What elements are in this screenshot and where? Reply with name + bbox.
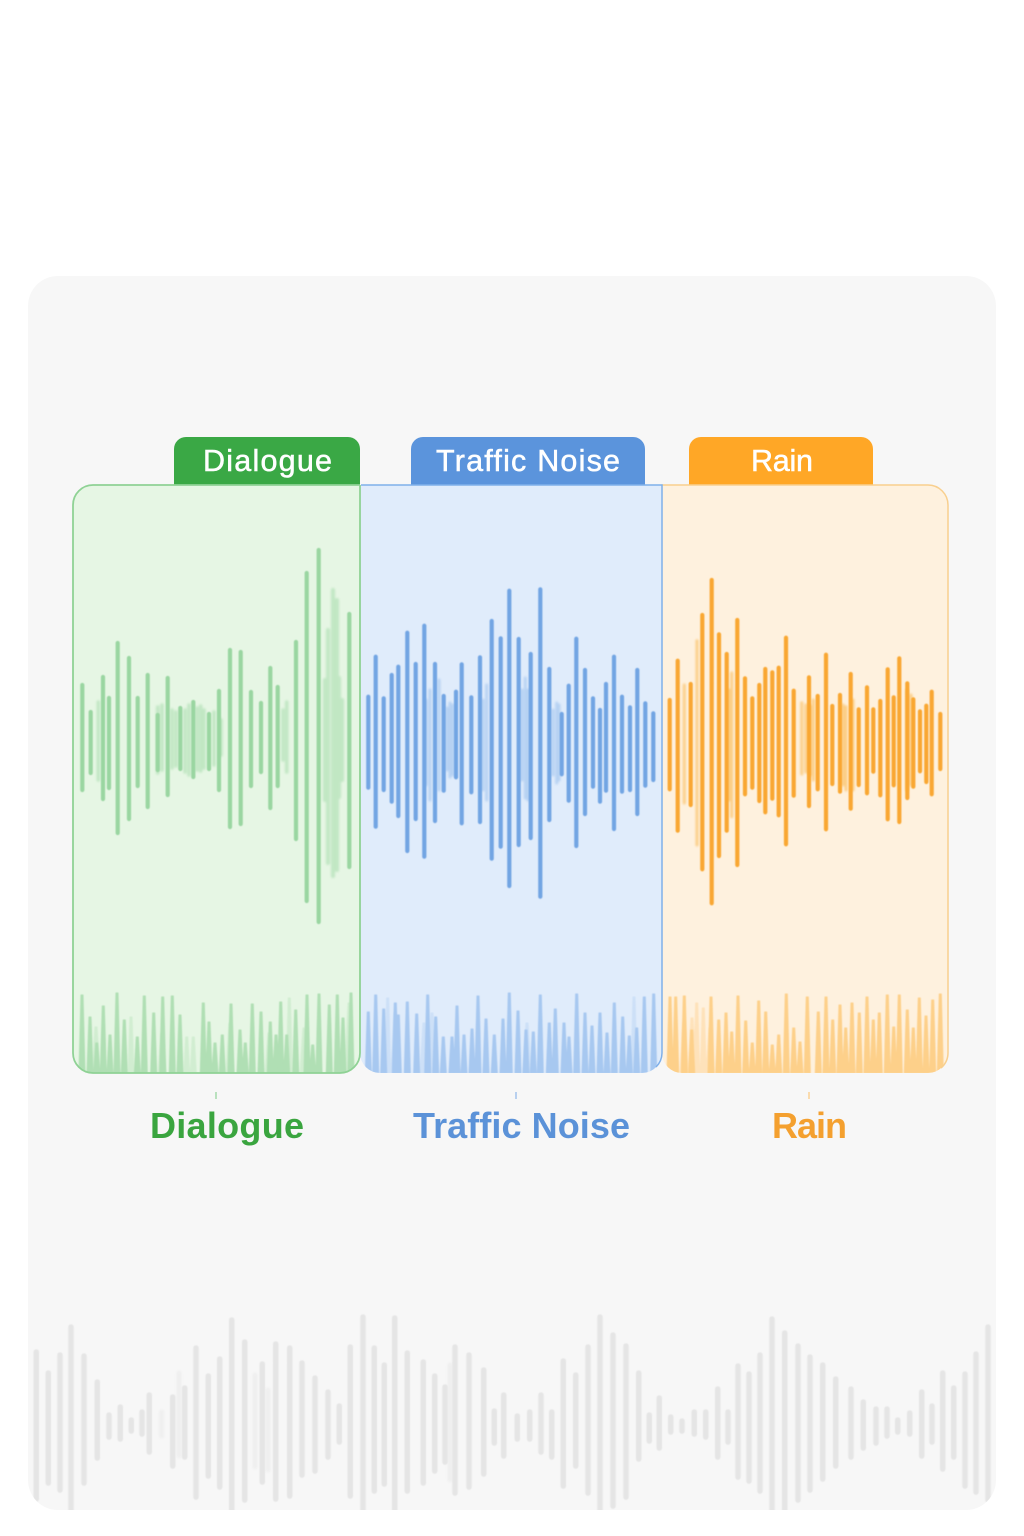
infographic canvas [32,437,992,1510]
panel borders [73,485,948,1073]
mini spikes: Traffic Noise [365,993,657,1073]
tab: Dialogue [174,437,360,485]
decorative grey waveform [36,1317,988,1520]
tick: Traffic Noise [515,1092,517,1099]
label: Traffic Noise: Traffic Noise [413,1105,630,1146]
tab: Rain [689,437,873,485]
panel: Dialogue waveform [73,485,360,1073]
tab: Traffic Noise [411,437,645,485]
mini spikes: Dialogue [79,993,354,1073]
waveform ghost strokes: Dialogue [98,590,342,876]
tab: Dialogue: Dialogue [203,444,332,478]
panel: Rain waveform [662,485,948,1073]
panel: background card [28,276,996,1510]
panel: Traffic Noise waveform [360,485,662,1073]
label: Dialogue: Dialogue [150,1105,304,1146]
tick: Dialogue [215,1092,217,1099]
waveform bars: Traffic Noise [368,589,653,897]
waveform ghost strokes: Rain [684,641,911,845]
mini spikes: Rain [667,994,943,1073]
label: Rain: Rain [772,1105,847,1146]
waveform bars: Rain [670,580,940,903]
tab: Rain: Rain [751,444,813,478]
waveform ghost strokes: Traffic Noise [426,678,559,800]
waveform bars: Dialogue [82,550,349,922]
tab: Traffic Noise: Traffic Noise [436,444,620,478]
tick: Rain [808,1092,810,1099]
